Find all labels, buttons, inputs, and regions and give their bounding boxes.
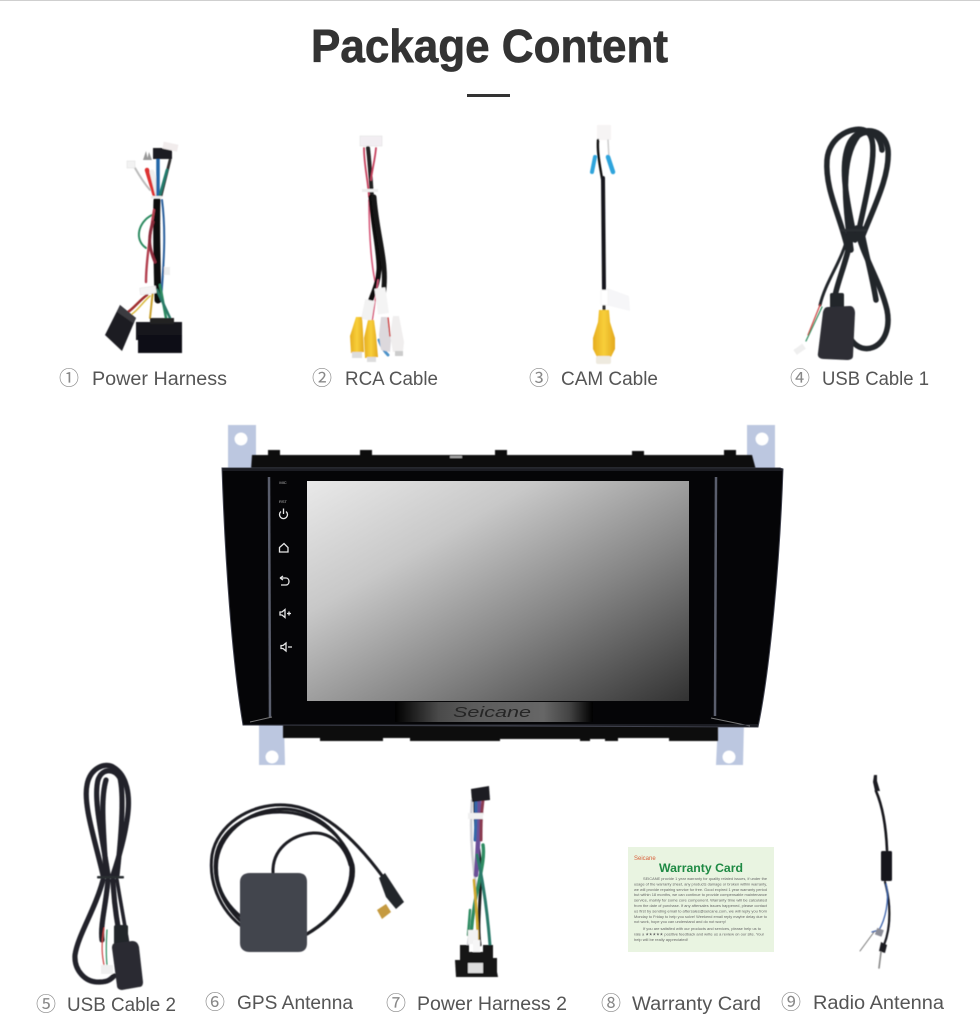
label: USB cable 2: ⑤ <box>36 993 56 1016</box>
icon: back <box>280 576 289 585</box>
card body: SEICANE provide 1 year warranty for quality related issues, if under the <box>643 876 768 881</box>
item 2: RCA cable <box>312 136 438 390</box>
card brand: Seicane <box>634 856 656 862</box>
photo: GPS antenna <box>211 805 404 952</box>
label: USB cable 2: USB Cable 2 <box>67 995 176 1016</box>
item 9: radio antenna <box>781 775 944 1014</box>
side panel edges <box>269 477 270 717</box>
label: CAM cable <box>529 367 658 390</box>
card body: from the date of purchase. If any aftersales issues happened, please contact <box>634 903 768 908</box>
card body: help will be really appreciated! <box>634 937 688 942</box>
button labels: RST <box>279 499 288 504</box>
label: RCA cable: ② <box>312 367 332 390</box>
head unit <box>222 425 783 765</box>
icon: power <box>280 508 287 519</box>
photo: CAM cable <box>592 125 630 364</box>
card body: Monday to Friday to help you solve! Weekend email reply maybe delay due to <box>634 914 768 919</box>
item 1: power harness <box>59 142 227 390</box>
card body <box>634 876 768 942</box>
item 6: GPS antenna <box>205 805 404 1014</box>
label: USB cable 1 <box>790 367 929 390</box>
label: RCA cable <box>312 367 438 390</box>
title underline <box>467 94 510 97</box>
brackets <box>228 425 775 765</box>
card body: us first by sending email to aftersales@seicane.com, we will reply you from <box>634 908 768 913</box>
card body: but within 18 months, we can continue to provide compensable maintenance <box>634 892 768 897</box>
label: CAM cable: CAM Cable <box>561 369 658 390</box>
icon: volume up <box>280 610 291 618</box>
card body: service, mainly for some core component. Warranty time will be calculated <box>634 898 767 903</box>
card body: usage of the warranty sheet, any products damage or broken within warranty, <box>634 881 767 886</box>
photo: RCA cable <box>350 136 404 362</box>
button labels: MIC <box>279 480 287 485</box>
label: power harness 2: ⑦ <box>386 992 406 1015</box>
top rule <box>0 0 980 1</box>
chassis <box>251 450 756 741</box>
label: power harness 2: Power Harness 2 <box>417 994 567 1015</box>
icon: home <box>280 544 288 552</box>
label: warranty card: Warranty Card <box>632 994 761 1015</box>
icon: volume down <box>281 643 292 651</box>
card heading: Warranty Card <box>659 863 743 875</box>
bezel <box>222 468 783 727</box>
photo: USB cable 2 <box>75 765 143 990</box>
card body: not work, hope you can understand and do not worry! <box>634 919 726 924</box>
label: radio antenna: Radio Antenna <box>813 993 944 1014</box>
item 4: USB cable 1 <box>790 129 929 390</box>
title: Package Content <box>311 20 668 72</box>
photo: power harness 2 <box>455 786 498 977</box>
item 7: power harness 2 <box>386 786 567 1015</box>
label: GPS antenna: ⑥ <box>205 991 225 1014</box>
label: USB cable 1: ④ <box>790 367 810 390</box>
label: radio antenna: ⑨ <box>781 991 801 1014</box>
label: power harness: Power Harness <box>92 369 227 390</box>
card <box>628 847 774 952</box>
card body: rate a ★★★★★ positive feedback and write us a review on our site. Your <box>634 932 765 936</box>
item 8: warranty card <box>601 847 774 1015</box>
screen <box>307 481 689 701</box>
brand: Seicane <box>453 704 531 721</box>
label: GPS antenna: GPS Antenna <box>237 993 353 1014</box>
label: warranty card: ⑧ <box>601 992 621 1015</box>
card body: If you are satisfied with our products and services, please help us to <box>643 926 762 931</box>
item 5: USB cable 2 <box>36 765 176 1016</box>
label: CAM cable: ③ <box>529 367 549 390</box>
item 3: CAM cable <box>529 125 658 390</box>
label: radio antenna <box>781 991 944 1014</box>
photo: radio antenna <box>860 775 892 968</box>
button icons <box>280 508 292 651</box>
reflection strip <box>395 702 593 722</box>
photo: power harness <box>105 142 182 353</box>
card body: we will provide repairing service for free. Good expired 1 year warranty period <box>634 887 767 892</box>
label: power harness: ① <box>59 367 79 390</box>
label: USB cable 1: USB Cable 1 <box>822 369 929 390</box>
photo: USB cable 1 <box>793 129 888 360</box>
button labels <box>279 480 288 504</box>
label: RCA cable: RCA Cable <box>345 369 438 390</box>
